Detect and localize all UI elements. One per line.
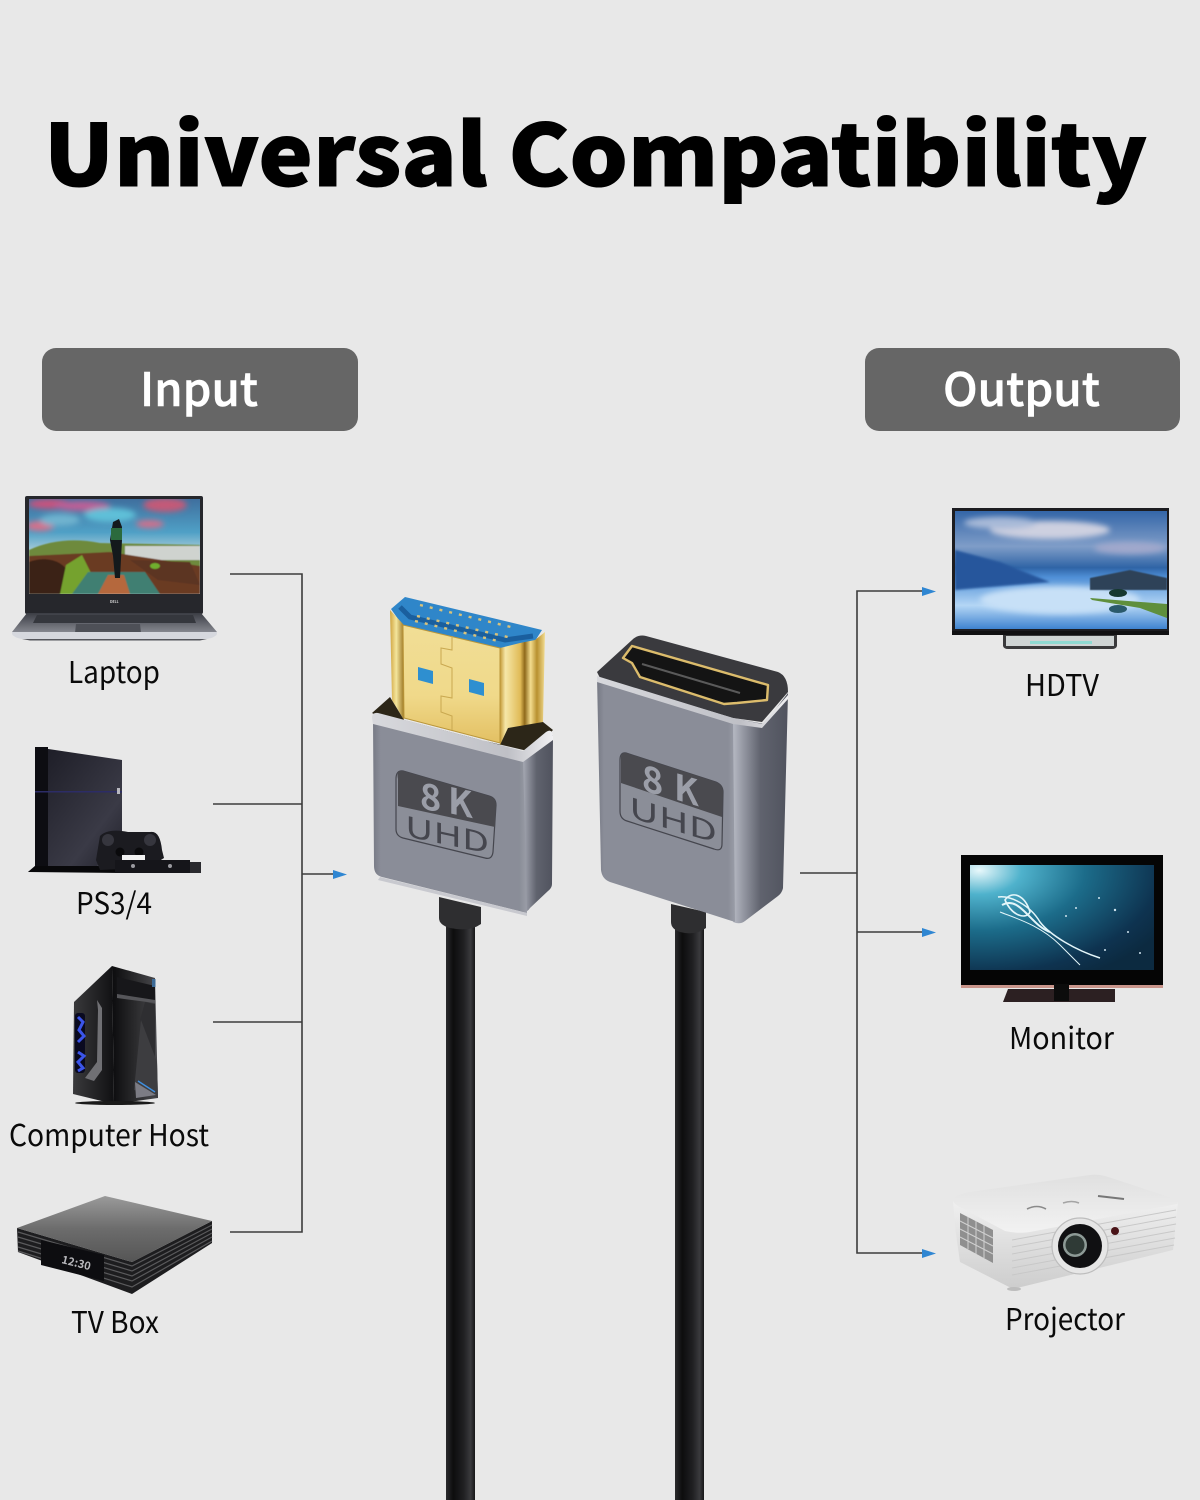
- icon: HDTV: [952, 508, 1169, 649]
- input connector lines: [213, 574, 347, 1232]
- icon: TV box: [17, 1196, 212, 1294]
- icon: laptop: DELL: [110, 600, 119, 605]
- label: computer host: Computer Host: [9, 1111, 209, 1155]
- icon: laptop: [12, 496, 217, 640]
- badge: 8K UHD: K: [448, 772, 474, 829]
- metal front: [597, 677, 735, 922]
- label: monitor: Monitor: [1009, 1014, 1114, 1058]
- metal front: [373, 720, 527, 913]
- port opening: [623, 646, 768, 704]
- input heading pill: [42, 348, 358, 431]
- gold front: [403, 625, 500, 743]
- badge: 8K UHD: 8: [642, 748, 663, 807]
- output heading pill: [865, 348, 1180, 431]
- badge: 8K UHD: [620, 748, 723, 852]
- output connector lines: [800, 587, 936, 1258]
- bright edge: [597, 676, 788, 728]
- cable: female side: [671, 904, 706, 1500]
- arrow: into male plug: [333, 870, 347, 879]
- icon: computer host: [73, 966, 158, 1105]
- badge: 8K UHD: UHD: [629, 786, 717, 852]
- icon: TV box: 12:30: [60, 1251, 93, 1274]
- gold left rim: [390, 610, 404, 720]
- label: laptop: Laptop: [68, 648, 160, 692]
- arrows: to output devices: [922, 587, 936, 1258]
- label: projector: Projector: [1005, 1295, 1125, 1339]
- label: HDTV: HDTV: [1025, 661, 1100, 705]
- HDMI female socket: [597, 636, 788, 923]
- badge: 8K UHD: 8: [420, 767, 441, 823]
- badge: 8K UHD: K: [674, 757, 699, 817]
- label: PS3/4: PS3/4: [76, 879, 152, 923]
- HDMI male plug: [372, 597, 553, 916]
- icon: monitor: [961, 855, 1163, 1002]
- title: Universal Compatibility: [44, 88, 1147, 211]
- metal side: [520, 735, 553, 912]
- blue tongue: [391, 597, 542, 650]
- badge: 8K UHD: [396, 767, 496, 863]
- icon: PS3/4 console: [28, 747, 201, 873]
- icon: projector: [953, 1175, 1178, 1291]
- label: TV box: TV Box: [71, 1298, 159, 1342]
- bright edge: [372, 713, 553, 762]
- contact windows: [418, 667, 433, 684]
- dark top face: [597, 636, 788, 722]
- gold right shell: [500, 632, 545, 745]
- cable: male side: [439, 897, 481, 1500]
- metal side: [733, 693, 788, 923]
- output heading pill: Output: [943, 354, 1100, 420]
- input heading pill: Input: [140, 354, 258, 420]
- badge: 8K UHD: UHD: [405, 804, 489, 863]
- dark collar: [372, 697, 553, 752]
